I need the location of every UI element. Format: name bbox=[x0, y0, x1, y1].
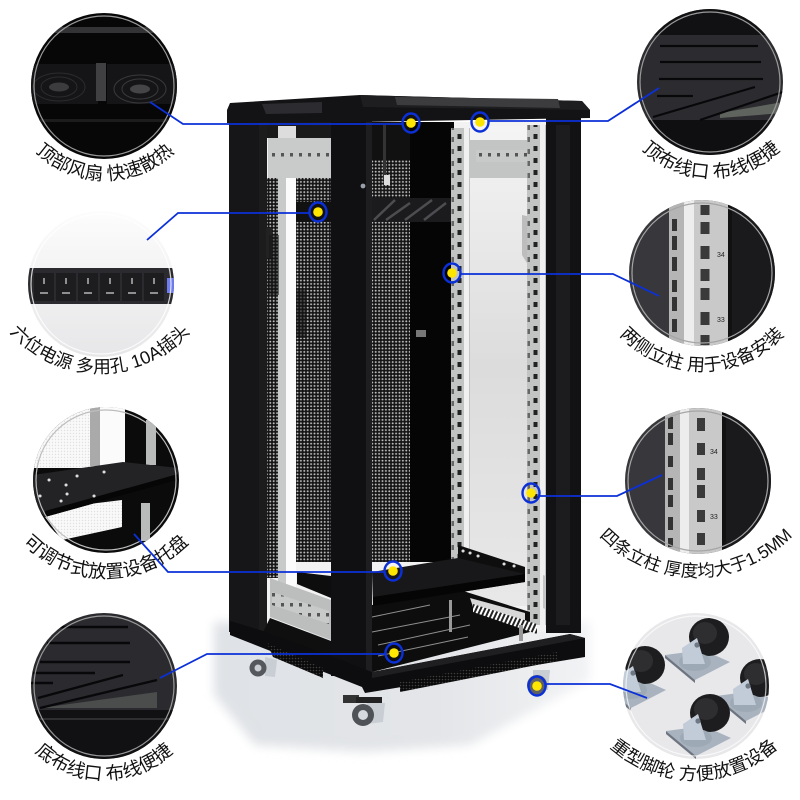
leader: top fan bbox=[150, 102, 420, 132]
cabinet interior background bbox=[257, 122, 547, 632]
left vertical post bbox=[451, 128, 470, 560]
back wall bbox=[370, 122, 454, 562]
leader: four posts bbox=[522, 475, 662, 502]
ring bbox=[31, 214, 171, 354]
callout: heavy casters bbox=[610, 613, 777, 782]
cabinet product photo bbox=[214, 95, 590, 752]
accessory bag bbox=[522, 215, 542, 268]
lower right rail bbox=[543, 575, 563, 618]
upper right rail bbox=[470, 140, 572, 178]
right vertical post bbox=[527, 125, 546, 625]
leader: casters bbox=[528, 676, 647, 698]
leader: side posts bbox=[444, 264, 659, 296]
leader lines and markers bbox=[134, 88, 662, 698]
cabinet top cover bbox=[227, 95, 590, 123]
ring bbox=[626, 616, 766, 756]
ring bbox=[628, 411, 768, 551]
callout: top fan bbox=[31, 13, 177, 182]
post photo circle bbox=[624, 406, 774, 558]
post photo circle: 33 bbox=[710, 514, 718, 521]
leader: top cable slots bbox=[472, 88, 659, 132]
callout: four posts bbox=[600, 408, 792, 579]
cabinet base bbox=[230, 621, 585, 693]
lower cabinet floor bbox=[372, 590, 537, 672]
callout: top cable slots bbox=[637, 9, 783, 180]
caption: 顶布线口 布线便捷 bbox=[642, 140, 780, 180]
lower left rail bbox=[262, 578, 331, 660]
ring bbox=[36, 410, 176, 550]
leveling foot bbox=[343, 695, 359, 703]
caption: 重型脚轮 方便放置设备 bbox=[610, 738, 777, 782]
cabinet front frame bbox=[229, 110, 581, 676]
casters photo circle bbox=[623, 613, 769, 759]
leader: tray bbox=[134, 534, 402, 580]
caption: 两侧立柱 用于设备安装 bbox=[620, 326, 784, 372]
leader: power strip bbox=[147, 202, 326, 240]
ring bbox=[640, 12, 780, 152]
rear window bbox=[470, 126, 528, 606]
leader: bottom slots bbox=[160, 644, 402, 678]
adjustable tray bbox=[372, 545, 525, 606]
fan photo circle bbox=[30, 12, 180, 162]
callout: power strip bbox=[10, 248, 190, 375]
rear caster bbox=[250, 657, 277, 677]
caption: 可调节式放置设备托盘 bbox=[26, 533, 190, 580]
caption: 四条立柱 厚度均大于1.5MM bbox=[600, 528, 792, 579]
post photo circle: 33 bbox=[717, 317, 725, 324]
right caster bbox=[527, 670, 550, 695]
caption: 六位电源 多用孔 10A插头 bbox=[10, 326, 190, 375]
left side perforated panel bbox=[257, 122, 331, 632]
callout: adjustable tray bbox=[26, 407, 190, 580]
power strip photo circle bbox=[28, 248, 174, 357]
floor shadow bbox=[214, 622, 590, 752]
ring bbox=[632, 203, 772, 343]
caption: 顶部风扇 快速散热 bbox=[36, 142, 175, 182]
post photo circle bbox=[628, 198, 778, 350]
right side dark panel bbox=[546, 122, 558, 627]
post photo circle: 34 bbox=[710, 449, 718, 456]
ring bbox=[34, 616, 174, 756]
ring bbox=[34, 16, 174, 156]
front caster bbox=[352, 697, 385, 726]
callout: bottom cable slots bbox=[31, 613, 177, 782]
tray photo circle bbox=[32, 406, 182, 556]
caption: 底布线口 布线便捷 bbox=[34, 742, 174, 782]
bottom slots photo circle bbox=[30, 612, 180, 762]
callout: side posts bbox=[620, 200, 784, 372]
left tray section bbox=[297, 572, 331, 598]
rear power strip bbox=[370, 198, 452, 222]
post photo circle: 34 bbox=[717, 252, 725, 259]
screw bbox=[361, 184, 365, 188]
top slots photo circle bbox=[636, 8, 786, 158]
